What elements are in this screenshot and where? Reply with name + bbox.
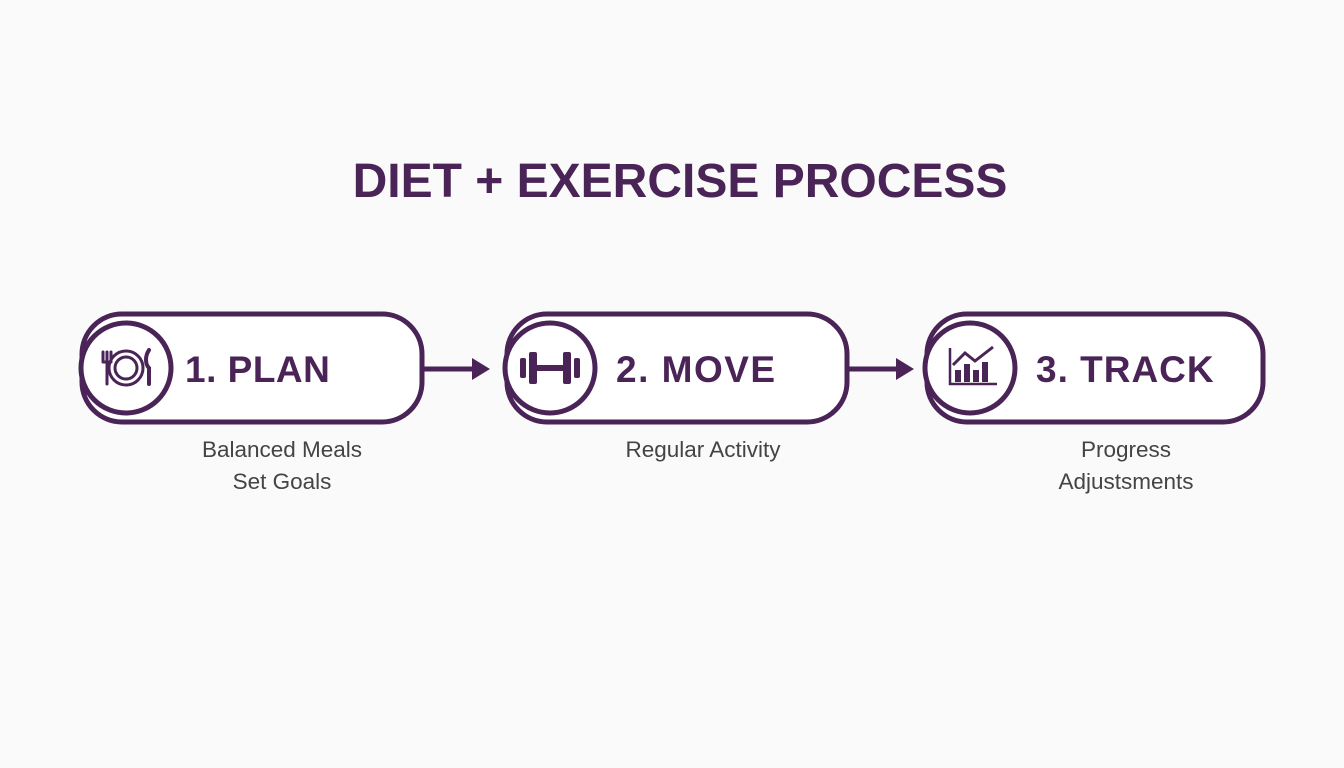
step 2: move: [505, 314, 847, 422]
descriptions: Set Goals: [233, 469, 331, 494]
step 1: plan: [81, 314, 422, 422]
icon: dumbbell: [520, 352, 580, 384]
descriptions: Regular Activity: [625, 437, 781, 462]
arrow 2: [849, 358, 914, 380]
descriptions: Balanced Meals: [202, 437, 362, 462]
arrow 1: [424, 358, 490, 380]
descriptions: Progress: [1081, 437, 1171, 462]
title: DIET + EXERCISE PROCESS: [353, 155, 1007, 208]
step 3: track: 3. TRACK: [1036, 349, 1215, 390]
step 2: move: 2. MOVE: [616, 349, 777, 390]
step 3: track: [925, 314, 1263, 422]
descriptions: Adjustsments: [1058, 469, 1194, 494]
icon: plate and cutlery: [103, 350, 149, 385]
icon: chart: [950, 347, 997, 384]
step 1: plan: 1. PLAN: [185, 349, 330, 390]
descriptions: [202, 437, 1194, 494]
